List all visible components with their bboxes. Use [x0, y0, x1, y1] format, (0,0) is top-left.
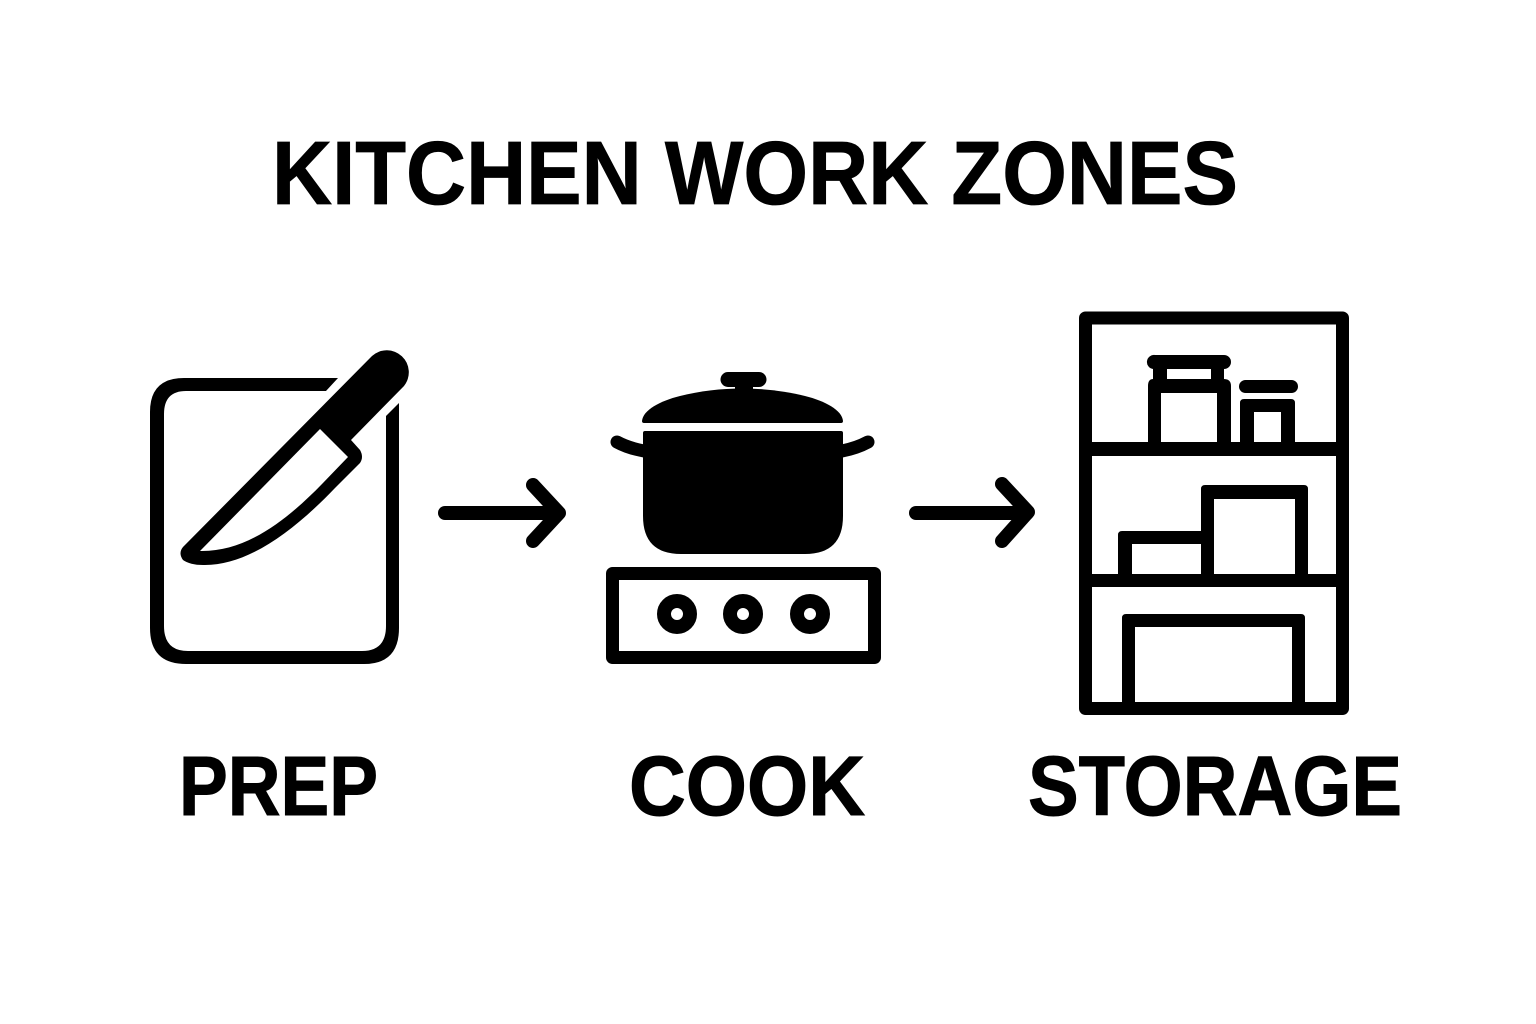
arrow: cook to storage — [916, 484, 1028, 541]
small jar — [1239, 380, 1298, 442]
icon: storage shelves — [1085, 318, 1343, 708]
title: KITCHEN WORK ZONES — [272, 124, 1238, 224]
large box — [1201, 485, 1308, 574]
pot lid — [642, 388, 843, 423]
stove knobs — [664, 601, 823, 627]
lid knob — [721, 372, 767, 392]
shelves — [1085, 442, 1343, 587]
knife silhouette — [180, 350, 409, 565]
icon: pot on stove — [612, 372, 874, 658]
icon: cutting board with knife — [150, 350, 409, 664]
shelf frame — [1086, 318, 1342, 708]
bottom bin — [1122, 614, 1305, 702]
knife — [180, 350, 409, 565]
stove — [612, 574, 874, 658]
pot handles — [617, 442, 868, 451]
arrow: prep to cook — [445, 485, 559, 541]
label: storage: STORAGE — [1028, 739, 1402, 833]
pot body — [643, 431, 843, 554]
label: cook: COOK — [629, 739, 865, 833]
knife blade — [200, 429, 348, 551]
label: prep: PREP — [179, 739, 378, 833]
cutting board — [150, 378, 399, 664]
small box — [1118, 531, 1201, 574]
large jar — [1147, 355, 1231, 442]
